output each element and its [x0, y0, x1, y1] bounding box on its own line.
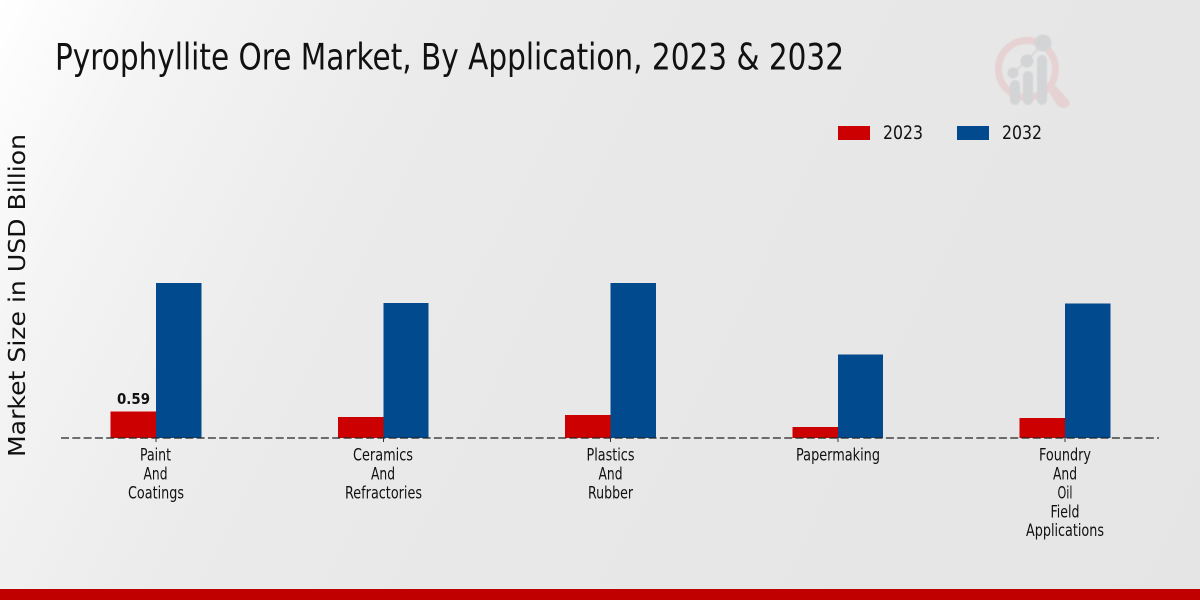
bars: Paint And Coatings [110, 283, 202, 438]
x label: Foundry And Oil Field Applications: Foundry [1039, 446, 1091, 464]
x label: Paint And Coatings: Coatings [128, 484, 184, 502]
x label: Plastics And Rubber: Plastics [586, 446, 634, 464]
bar chart [61, 283, 1159, 442]
legend item: 2023 [838, 122, 923, 144]
x label: Foundry And Oil Field Applications: Applications [1026, 521, 1104, 540]
x label: Ceramics And Refractories: Ceramics [353, 446, 413, 464]
x label: Foundry And Oil Field Applications: Oil [1058, 484, 1072, 502]
y axis title: Market Size in USD Billion [5, 134, 31, 457]
x label: Foundry And Oil Field Applications: Field [1050, 502, 1080, 522]
bars: Plastics And Rubber [565, 283, 656, 438]
x label: Plastics And Rubber [586, 446, 634, 502]
bars: Foundry And Oil Field Applications [1020, 304, 1110, 438]
x label: Plastics And Rubber: Rubber [588, 484, 633, 502]
legend item: 2032 [957, 122, 1042, 144]
bars: Papermaking [792, 354, 883, 438]
axis baseline [61, 437, 1159, 439]
legend [838, 122, 1042, 144]
x label: Ceramics And Refractories [345, 446, 422, 502]
bars: Ceramics And Refractories [338, 303, 428, 438]
x label: Paint And Coatings: Paint [140, 446, 171, 464]
icon: watermark logo [998, 34, 1069, 108]
x label: Papermaking: Papermaking [796, 446, 880, 464]
data label: 0.59: 0.59 [117, 390, 150, 408]
x label: Ceramics And Refractories: Refractories [345, 484, 422, 502]
title: Pyrophyllite Ore Market, By Application, 2023 & 2032 [55, 36, 844, 78]
legend item: 2032: 2032 [1002, 122, 1042, 144]
x label: Paint And Coatings [128, 446, 184, 502]
legend item: 2023: 2023 [883, 122, 923, 144]
x label: Paint And Coatings: And [144, 464, 168, 484]
x label: Plastics And Rubber: And [598, 464, 622, 484]
x label: Foundry And Oil Field Applications: And [1053, 464, 1077, 484]
x label: Foundry And Oil Field Applications [1026, 446, 1104, 540]
footer bar [0, 589, 1200, 600]
x label: Ceramics And Refractories: And [371, 464, 395, 484]
